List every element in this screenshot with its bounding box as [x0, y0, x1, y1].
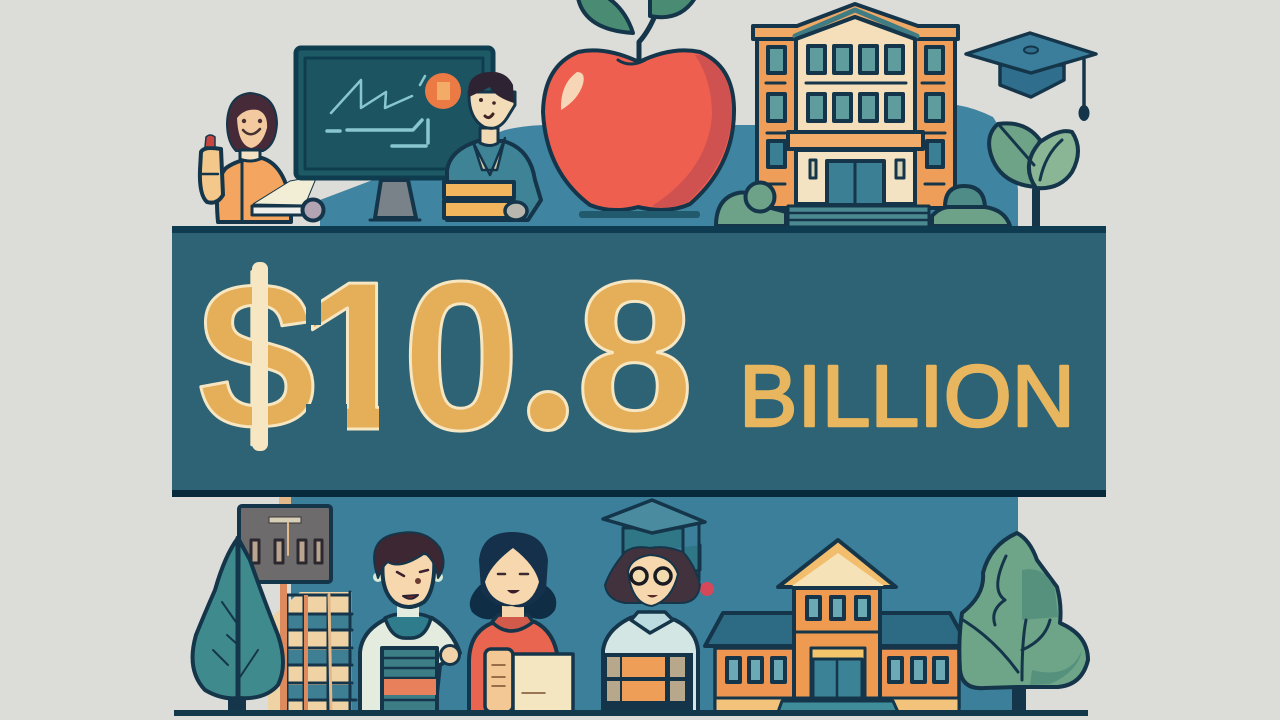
illustration: apple	[543, 0, 734, 218]
illustration: graduate with glasses and books	[603, 500, 714, 713]
illustration: boy student with books	[360, 532, 460, 712]
illustration: bushes	[716, 182, 1010, 226]
illustration: conifer tree	[193, 538, 283, 713]
infographic canvas	[172, 0, 1106, 716]
baseline	[174, 710, 1088, 716]
main banner	[172, 226, 1106, 497]
illustration: school building	[753, 4, 958, 227]
headline unit: BILLION	[739, 348, 1075, 445]
illustration: graduation cap	[966, 33, 1096, 121]
illustration: blackboard monitor	[296, 48, 493, 220]
illustration: two-leaf plant	[989, 123, 1078, 226]
illustration: girl student with open book	[469, 532, 573, 712]
headline amount: $10.8	[198, 237, 694, 474]
backdrop: top blue hill	[320, 105, 1018, 228]
illustration: leafy tree	[959, 533, 1088, 712]
illustration: teacher with books	[444, 72, 541, 220]
backdrop: bottom blue panel	[291, 494, 1018, 714]
illustration: signboard and bookshelf	[239, 497, 356, 712]
illustration: teacher with paper	[200, 93, 324, 222]
illustration: small school	[705, 540, 968, 712]
